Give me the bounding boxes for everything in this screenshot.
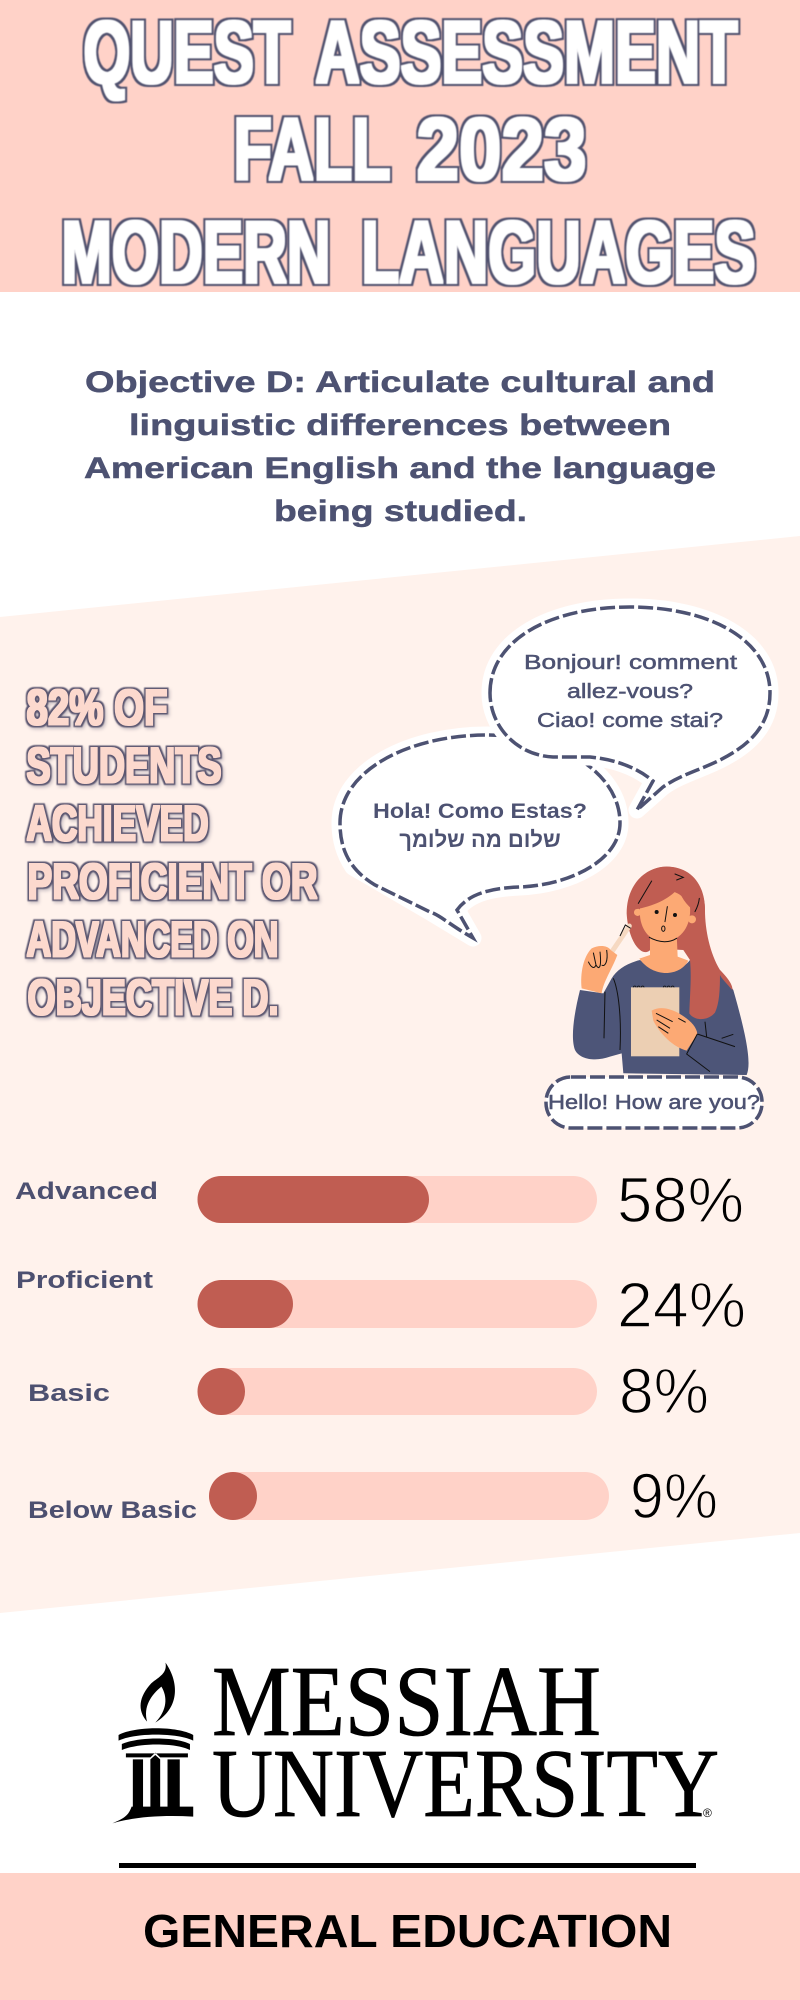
objective statement: American English and the language: [84, 452, 716, 485]
title: [62, 2, 756, 302]
row: Advanced 58%: 58%: [617, 1164, 744, 1236]
speech bubble: French and Italian: [490, 607, 770, 810]
proficiency callout: ADVANCED ON: [26, 912, 278, 968]
speech bubble: Spanish and Hebrew: שלום מה שלומך: [399, 827, 561, 852]
speech bubble: French and Italian: Ciao! come stai?: [537, 710, 723, 732]
row: Proficient 24%: 24%: [617, 1269, 746, 1341]
title: 2023: [416, 100, 586, 198]
footer band: [0, 1873, 800, 2000]
row: Basic 8%: 8%: [619, 1355, 709, 1427]
row: Below Basic 9%: Below Basic: [28, 1497, 197, 1524]
proficiency callout: 82% OF: [26, 680, 168, 736]
title: QUEST: [84, 2, 290, 102]
row: Proficient 24%: [16, 1267, 746, 1341]
speech bubble: Spanish and Hebrew: Hola! Como Estas?: [373, 800, 587, 823]
row: Proficient 24%: Proficient: [16, 1267, 153, 1294]
proficiency callout: STUDENTS: [26, 738, 222, 794]
logo: Messiah University: UNIVERSITY: [212, 1730, 719, 1837]
proficiency callout: OBJECTIVE D.: [28, 970, 278, 1026]
speech bubble: English greeting: [546, 1077, 762, 1128]
long hair: [627, 867, 732, 1019]
row: Advanced 58%: [15, 1164, 744, 1236]
proficiency callout: PROFICIENT OR: [28, 854, 318, 910]
neck and collar: [639, 933, 688, 973]
row: Basic 8%: Basic: [28, 1380, 110, 1407]
objective statement: [84, 366, 716, 528]
header band with title: [0, 0, 800, 302]
objective statement: being studied.: [274, 495, 527, 528]
fringe: [634, 867, 705, 913]
illustration: student with notepad: [573, 867, 749, 1075]
sweater: [573, 960, 749, 1075]
speech bubble: English greeting: Hello! How are you?: [548, 1092, 760, 1114]
logo: Messiah University: [112, 1645, 719, 1837]
face: [640, 890, 690, 942]
notepad: [631, 987, 679, 1056]
row: Advanced 58%: Advanced: [15, 1178, 158, 1205]
panel: slanted peach background: [0, 536, 800, 1613]
speech bubble: Spanish and Hebrew: [340, 735, 620, 938]
speech bubble: French and Italian: allez-vous?: [567, 681, 693, 703]
proficiency callout: [26, 680, 318, 1026]
row: Basic 8%: [28, 1355, 709, 1427]
footer label: GENERAL EDUCATION: [143, 1905, 672, 1957]
title: FALL: [234, 100, 390, 198]
pen: [592, 926, 629, 982]
raised hand: [581, 946, 617, 993]
divider line: [119, 1863, 696, 1868]
title: MODERN: [62, 202, 330, 302]
row: Below Basic 9%: [28, 1460, 718, 1532]
logo: Messiah University: MESSIAH: [212, 1645, 601, 1757]
speech bubble: French and Italian: Bonjour! comment: [524, 652, 738, 674]
icon: torch: [112, 1663, 193, 1823]
bar chart: [15, 1164, 746, 1532]
proficiency callout: ACHIEVED: [26, 796, 208, 852]
objective statement: linguistic differences between: [129, 409, 671, 442]
right hand: [652, 1008, 697, 1051]
logo: Messiah University: ®: [703, 1806, 712, 1820]
row: Below Basic 9%: 9%: [630, 1460, 718, 1532]
facial features: [638, 874, 699, 942]
objective statement: Objective D: Articulate cultural and: [85, 366, 715, 399]
